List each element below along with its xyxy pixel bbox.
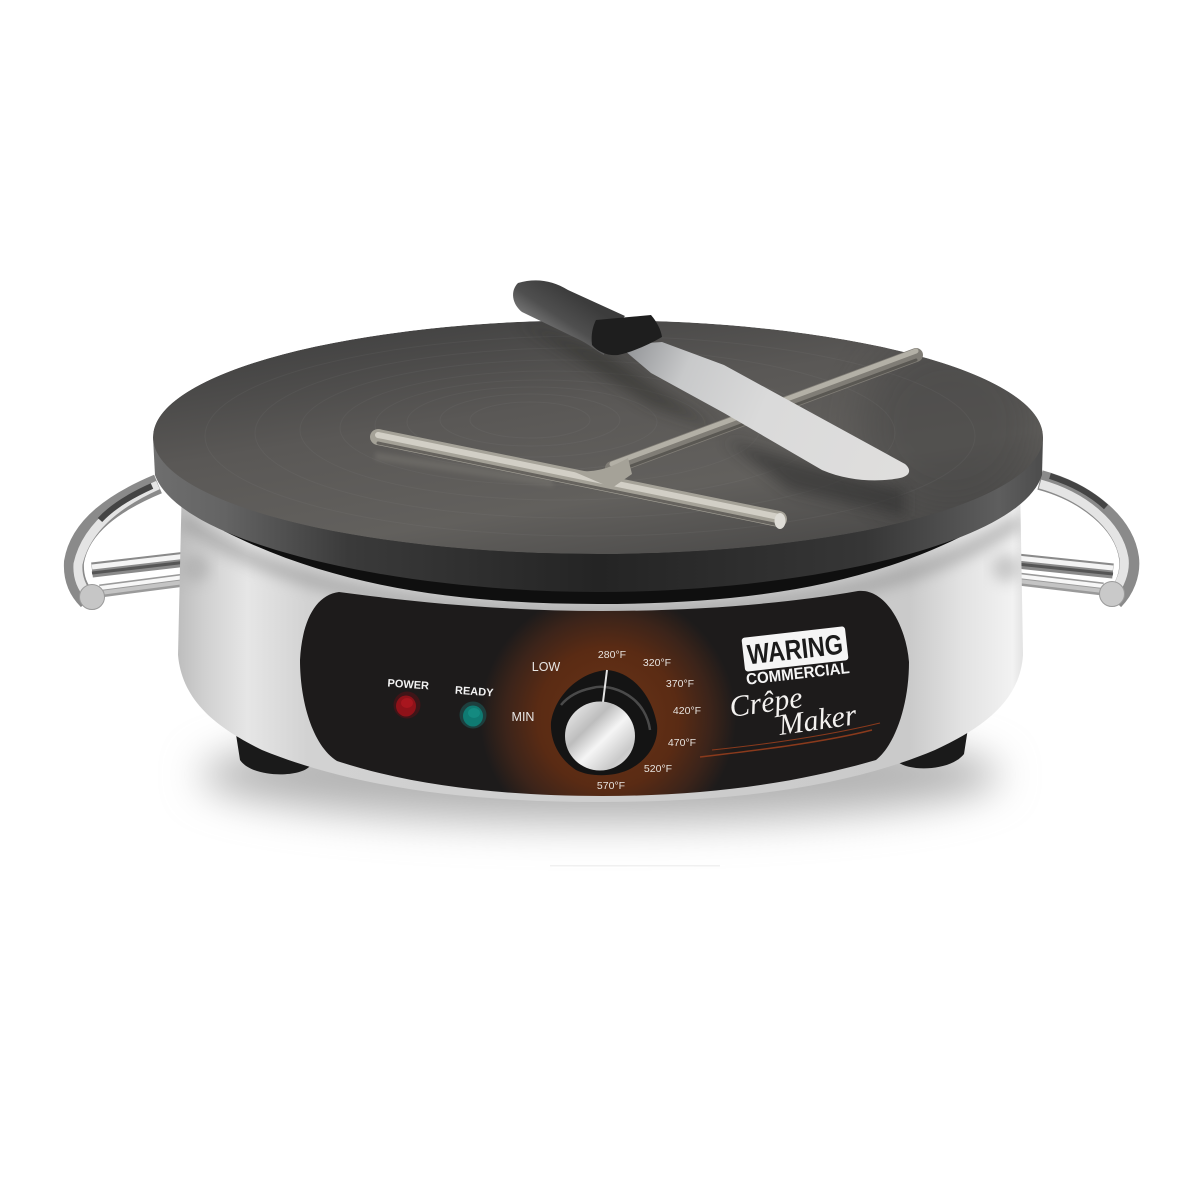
feet — [235, 728, 968, 774]
power label: POWER — [387, 678, 429, 692]
ready light — [460, 702, 486, 728]
waring commercial logo: WARING — [746, 629, 845, 670]
product photo: crepe maker — [64, 280, 1140, 866]
left handle — [74, 484, 192, 610]
crepe maker wordmark — [727, 681, 859, 742]
waring commercial logo — [741, 626, 851, 689]
spatula handle — [513, 280, 625, 355]
temperature scale: 570°F — [597, 780, 625, 792]
temperature scale: 370°F — [666, 678, 694, 690]
temperature scale: 320°F — [643, 657, 671, 669]
spatula collar — [592, 315, 662, 355]
temperature scale — [597, 649, 701, 792]
temperature scale: 420°F — [673, 705, 701, 717]
power light — [394, 692, 420, 718]
gap under griddle — [224, 510, 972, 604]
low label: LOW — [532, 660, 560, 674]
crepe spreader — [378, 351, 916, 529]
crepe maker wordmark: Crêpe — [727, 681, 805, 724]
ground shadow — [200, 727, 1000, 866]
spatula — [513, 280, 909, 480]
spreader stem — [612, 351, 916, 473]
min label: MIN — [512, 710, 534, 724]
temperature scale: 280°F — [598, 649, 626, 661]
temperature knob — [551, 670, 657, 775]
spreader bar — [378, 435, 786, 529]
temperature scale: 470°F — [668, 737, 696, 749]
waring commercial logo: COMMERCIAL — [745, 660, 851, 689]
temperature scale: 520°F — [644, 763, 672, 775]
right handle — [1010, 476, 1129, 606]
griddle cooking surface — [153, 320, 1043, 554]
wordmark underline — [700, 723, 880, 757]
ready label: READY — [455, 685, 494, 699]
griddle rim — [153, 437, 1043, 592]
spatula blade — [618, 342, 909, 480]
stainless steel body — [178, 504, 1023, 802]
control panel — [300, 591, 909, 796]
crepe maker wordmark: Maker — [775, 698, 859, 742]
